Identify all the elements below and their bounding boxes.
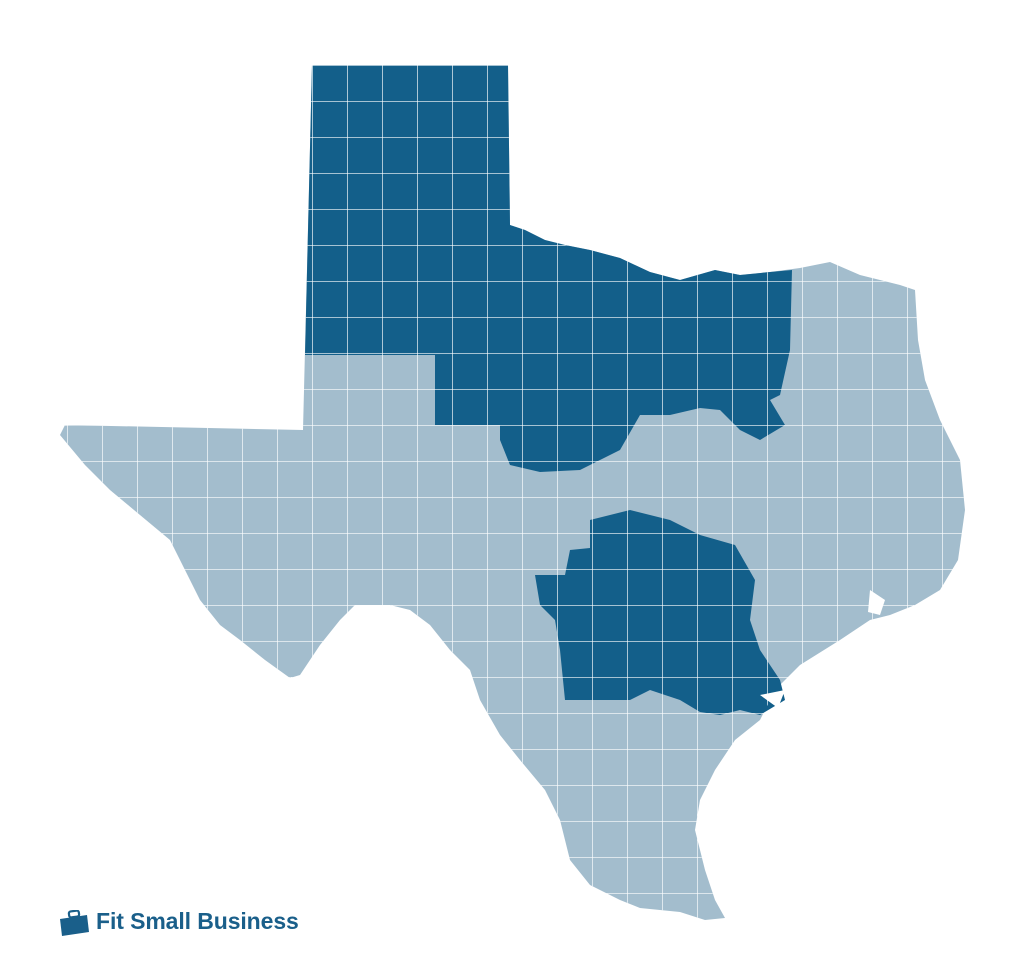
region: north dark [305,65,792,472]
region: central dark [535,510,785,715]
icon: briefcase [60,910,89,936]
map: Texas counties [60,66,965,920]
region: light blue state [60,65,965,920]
logo: Fit Small Business: Fit Small Business [96,908,299,934]
